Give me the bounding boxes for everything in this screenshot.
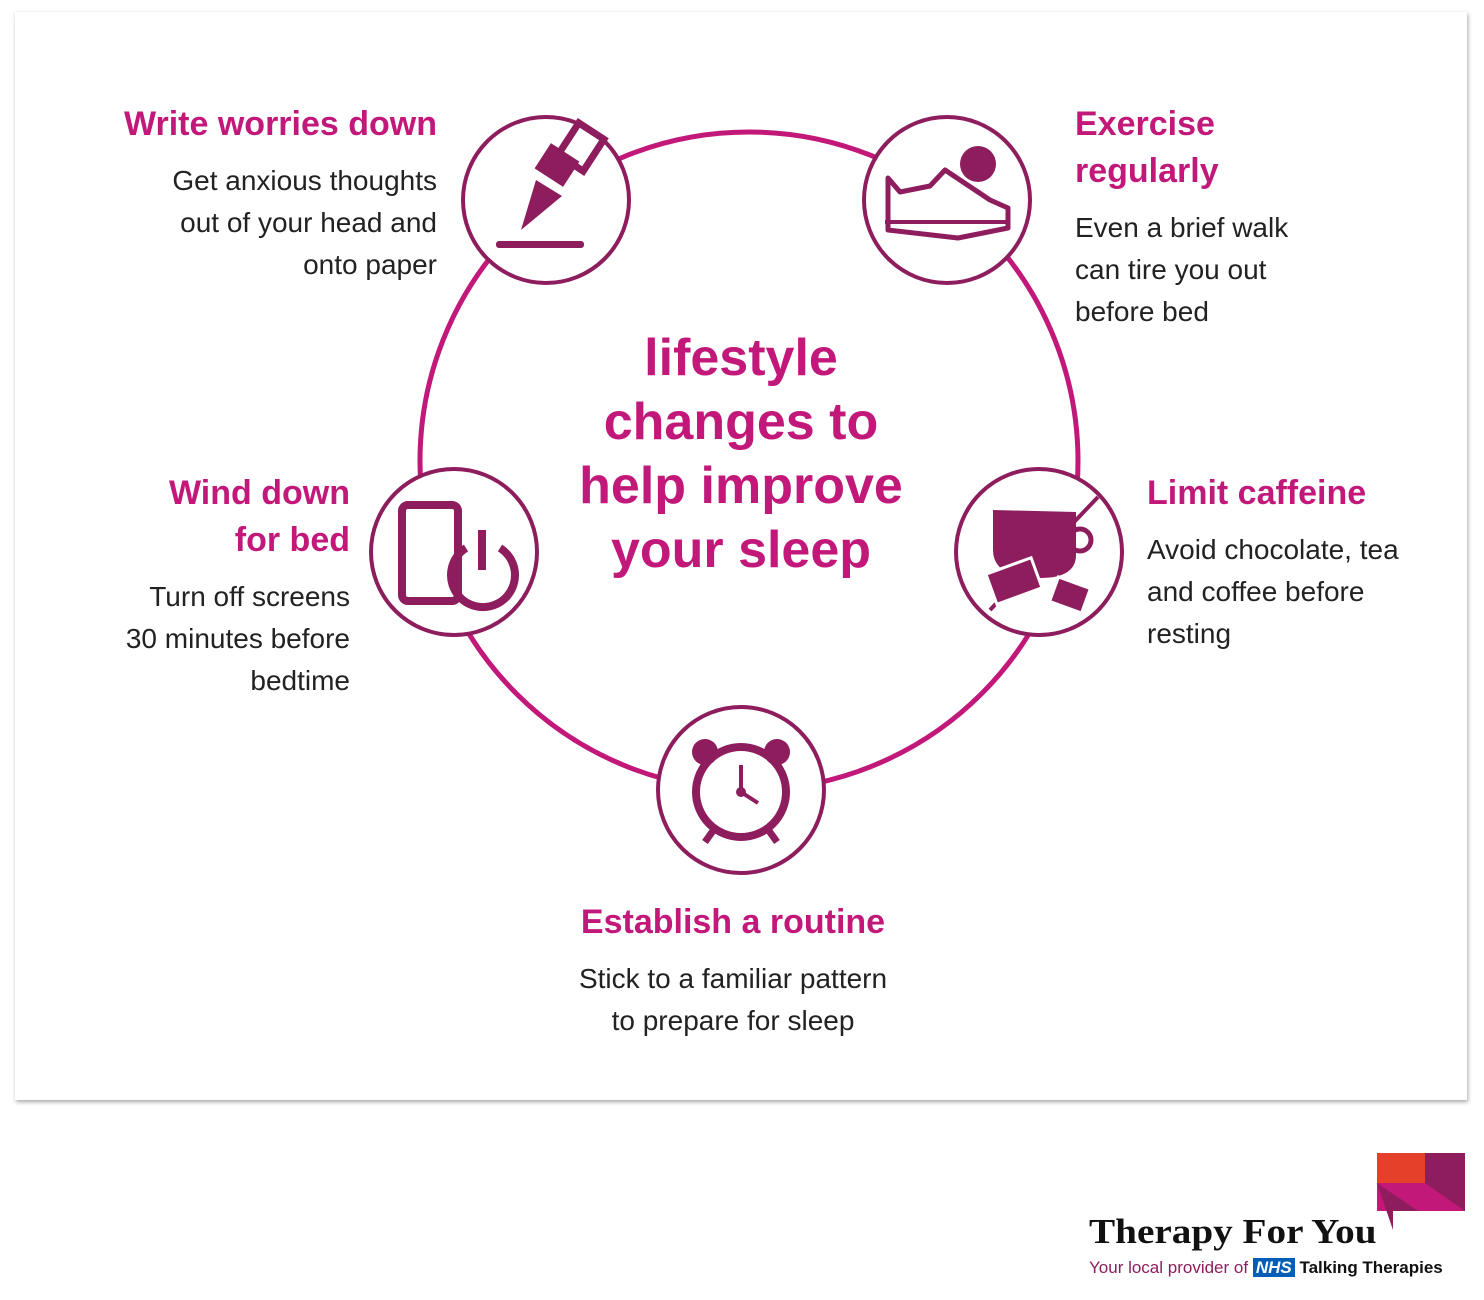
text: wind down: 30 minutes before [126, 623, 350, 654]
text: exercise: can tire you out [1075, 254, 1266, 285]
icon: pen [463, 117, 629, 283]
text: wind down [126, 474, 350, 696]
text: write worries: onto paper [303, 249, 437, 280]
text: caffeine: resting [1147, 618, 1231, 649]
ring [420, 132, 1078, 790]
icon: phone [371, 469, 537, 635]
text: routine [579, 903, 887, 1036]
text: routine: Establish a routine [581, 903, 885, 941]
text: caffeine [1147, 474, 1399, 649]
title: lifestyle changes to help improve your sleep [579, 329, 903, 579]
icon: alarm clock [658, 707, 824, 873]
text: routine: Stick to a familiar pattern [579, 963, 887, 994]
text: write worries: Write worries down [124, 105, 437, 143]
text: write worries: out of your head and [180, 207, 437, 238]
icon: shoe [864, 117, 1030, 283]
logo: Therapy For You [1089, 1212, 1377, 1251]
text: caffeine: and coffee before [1147, 576, 1364, 607]
logo: Your local provider of NHS Talking Therapies [1089, 1258, 1443, 1277]
text: wind down: Turn off screens [149, 581, 350, 612]
text: exercise: Exercise [1075, 105, 1215, 143]
text: exercise [1075, 105, 1288, 327]
text: exercise: regularly [1075, 152, 1219, 190]
text: caffeine: Avoid chocolate, tea [1147, 534, 1399, 565]
text: wind down: Wind down [169, 474, 350, 512]
text: wind down: bedtime [250, 665, 350, 696]
text: write worries [124, 105, 437, 280]
logo [1089, 1153, 1465, 1277]
text: routine: to prepare for sleep [612, 1005, 854, 1036]
text: caffeine: Limit caffeine [1147, 474, 1366, 512]
text: exercise: Even a brief walk [1075, 212, 1288, 243]
text: write worries: Get anxious thoughts [172, 165, 437, 196]
text: wind down: for bed [235, 521, 350, 559]
text: exercise: before bed [1075, 296, 1209, 327]
icon: no caffeine [956, 469, 1122, 635]
